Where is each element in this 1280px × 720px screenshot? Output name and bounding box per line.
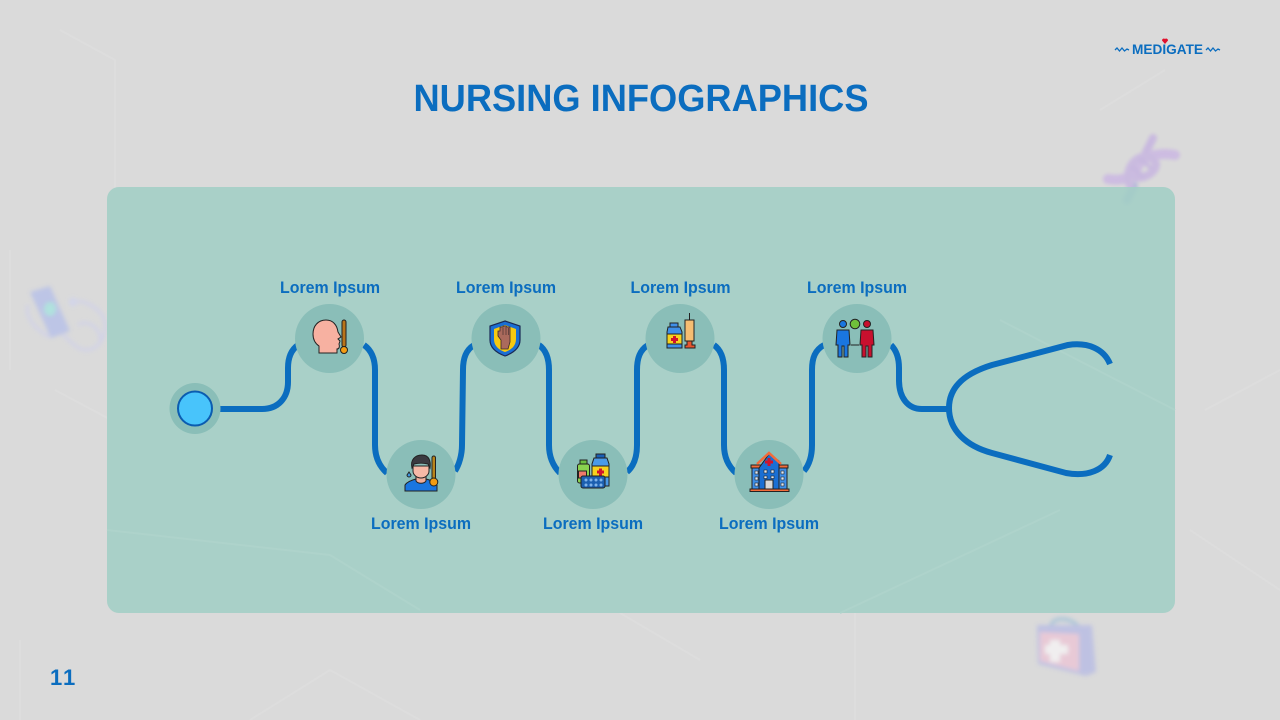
- start node: [170, 383, 220, 434]
- icon: phone with cable: [27, 286, 105, 350]
- page number: 11: [50, 665, 75, 690]
- step 6 label: Lorem Ipsum: [719, 515, 819, 533]
- step 1 label: Lorem Ipsum: [280, 279, 380, 297]
- step 5: vial and syringe: [646, 304, 714, 373]
- step 7: two people with distance: [822, 304, 892, 373]
- step 4: medicine bottles and pills: [558, 440, 628, 509]
- step 2: feverish man: [386, 440, 456, 509]
- title: NURSING INFOGRAPHICS: [414, 78, 868, 120]
- logo: Medigate: [1115, 39, 1220, 57]
- step 6: hospital: [734, 440, 804, 509]
- step 2 label: Lorem Ipsum: [371, 515, 471, 533]
- step 3: shield with hand: [472, 304, 540, 373]
- step 5 label: Lorem Ipsum: [630, 279, 730, 297]
- stethoscope tube: [215, 344, 1110, 474]
- step 7 label: Lorem Ipsum: [807, 279, 907, 297]
- panel: stethoscope timeline: [107, 187, 1175, 613]
- step 3 label: Lorem Ipsum: [456, 279, 556, 297]
- logo: Medigate: MEDIGATE: [1132, 42, 1203, 57]
- step 4 label: Lorem Ipsum: [543, 515, 643, 533]
- icon: DNA helix: [1108, 138, 1175, 200]
- icon: first aid kit: [1037, 619, 1096, 676]
- step 1: head and thermometer: [295, 304, 364, 373]
